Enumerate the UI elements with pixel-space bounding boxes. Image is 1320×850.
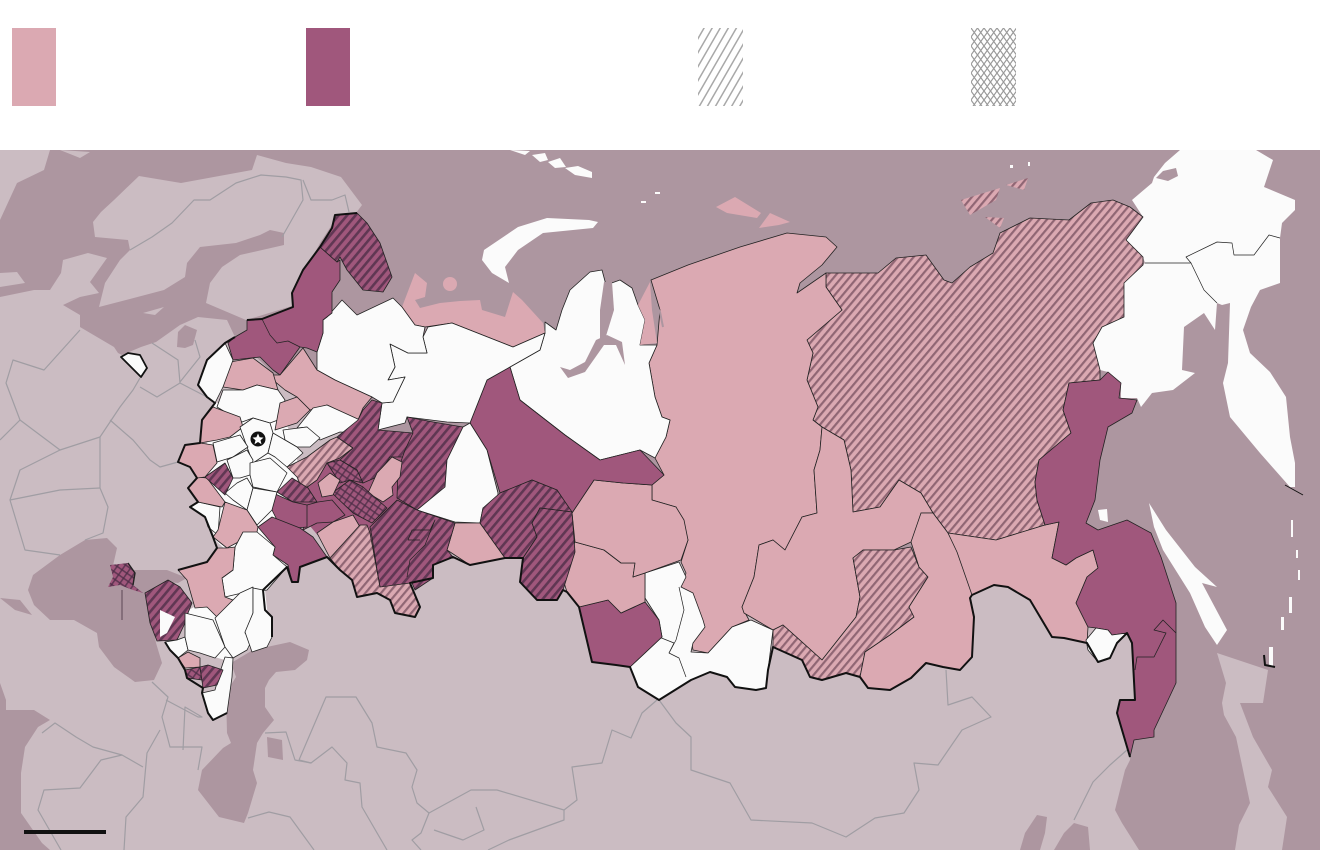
region: Kaliningrad: [121, 353, 147, 377]
region: Saratov pink: [317, 515, 360, 558]
region: Kaluga white: [213, 435, 248, 462]
region: Tambov dark: [272, 493, 307, 528]
region: Novgorod pink: [223, 358, 278, 390]
line: Karelia border: [262, 319, 300, 347]
region: Samara hatched: [330, 525, 420, 617]
Kara-Bogaz: [267, 737, 283, 760]
islands: small Arctic specks: [641, 162, 1030, 203]
scale bar: [24, 830, 106, 834]
Gulf of Riga: [177, 325, 197, 348]
region: Nizhny Novgorod hatched: [287, 437, 353, 490]
islands: New Siberian: [961, 178, 1028, 228]
islands: Franz Josef Land: [510, 150, 592, 178]
map: inland seas: [0, 325, 1090, 850]
line: Khakassia: [669, 587, 686, 677]
region: Omsk hatched: [520, 508, 575, 600]
region: Karelia and Leningrad: [228, 247, 340, 375]
legend swatch: light pink: [12, 28, 56, 106]
region: Yaroslavl pink: [275, 397, 310, 430]
water: Gulf of Ob: [560, 282, 625, 378]
water: Yenisei Gulf: [655, 303, 663, 327]
Okhotsk tip Sakhalin: [1149, 503, 1227, 645]
region: Voronezh dark: [258, 517, 327, 582]
region: Moscow white: [240, 418, 273, 463]
region: Tuva and Khakassia: [630, 562, 773, 700]
internal lines: far east: [1145, 235, 1280, 303]
region: Jewish Autonomous: [1086, 628, 1127, 662]
line: Altai: [659, 637, 674, 653]
national border of Russia: [165, 213, 1303, 757]
water: Chaun Bay: [1156, 168, 1178, 181]
region: Nenets pink: [402, 273, 545, 347]
region: Komi: [378, 323, 545, 430]
underlay: Volga regions: [280, 440, 450, 590]
map: neighbouring country borders: [0, 175, 1127, 850]
underlay: European Russia west: [185, 400, 300, 660]
legend swatch: diagonal hatch: [698, 28, 743, 106]
region: Bryansk hatched: [205, 463, 233, 495]
region: Tatarstan crosshatched: [332, 480, 387, 523]
region: Pink west: [178, 443, 217, 478]
region: Pskov white: [198, 343, 233, 403]
region: Bashkortostan hatched: [370, 500, 455, 590]
region: Khanty-Mansi: [470, 367, 664, 513]
island: Novaya Zemlya: [482, 218, 598, 283]
region: Kamchatka: [1186, 235, 1295, 487]
region: Chechnya hatched: [200, 665, 223, 688]
Yellow Sea fragment: [1054, 823, 1090, 850]
icon: Moscow star marker: [250, 432, 266, 446]
island: Shantar: [1098, 509, 1108, 522]
region: Stavropol whites: [165, 587, 272, 720]
region: Perm hatched: [397, 417, 463, 510]
region: Ossetia crosshatched: [185, 667, 202, 680]
region: Kuban hatched: [145, 580, 192, 641]
region: Chelyabinsk pink: [447, 523, 505, 565]
region: Gydan pink: [638, 282, 657, 345]
region: Irkutsk: [742, 427, 933, 660]
region: Pink south central: [213, 502, 258, 548]
region: Ivanovo white: [283, 427, 320, 447]
region: Oryol pink: [188, 477, 225, 507]
region: Krasnodar pink: [178, 547, 235, 617]
line: Primorye boundary: [1135, 620, 1176, 670]
line: Nenets south border: [415, 323, 545, 347]
region group: central whites: [190, 450, 287, 535]
lake: [160, 610, 175, 637]
region: Zabaykalsky: [860, 513, 979, 690]
line: Crimea border: [128, 563, 135, 585]
islands: Kurils: [1269, 520, 1300, 667]
Black Sea and Azov: [28, 538, 187, 682]
island: Kolguev: [443, 277, 457, 291]
region: Kemerovo dark: [579, 600, 662, 667]
line: Bashkortostan inner: [407, 520, 435, 577]
map: Russian regions: [108, 150, 1295, 757]
region: Karachay pink: [178, 652, 200, 668]
region: Chukotka: [1126, 150, 1295, 263]
region: Penza hatched: [277, 478, 317, 502]
islands: Severnaya Zemlya: [716, 197, 790, 228]
region: Smolensk pink: [200, 407, 243, 443]
region: Udmurtia pink: [368, 457, 402, 502]
legend: [12, 28, 1016, 106]
Bo Hai: [1020, 815, 1047, 850]
legend swatch: dark purple: [306, 28, 350, 106]
region: Krasnoyarsk: [649, 233, 842, 653]
region group: far east white: [1093, 150, 1295, 645]
region: Tyumen hatched: [480, 480, 572, 558]
region: Kirov hatched: [337, 400, 413, 483]
region: Vologda pink: [273, 348, 372, 420]
region: Buryatia: [773, 547, 928, 680]
region: Magadan: [1093, 263, 1217, 407]
region: Chuvashia crosshatched: [327, 460, 363, 483]
region: Yakutia: [807, 200, 1143, 540]
region: Tver white: [217, 385, 285, 423]
region: Rostov white: [222, 532, 287, 597]
region: Novosibirsk pink: [560, 542, 645, 613]
leader line: [121, 590, 123, 620]
region: Murmansk: [320, 213, 392, 292]
region: Arkhangelsk: [317, 298, 427, 403]
region: Crimea crosshatched: [108, 563, 143, 593]
region: Yamalo-Nenets: [510, 270, 670, 460]
region: Mordovia pink: [318, 473, 340, 497]
region: Amur: [948, 522, 1098, 643]
Caspian Sea: [198, 642, 309, 823]
region: Khabarovsk north: [1035, 372, 1176, 757]
Aegean fragment: [0, 598, 32, 615]
region: Kostroma white: [297, 405, 362, 440]
region: Sverdlovsk white: [417, 423, 498, 523]
legend swatch: cross hatch: [971, 28, 1016, 106]
region: Vladimir white: [268, 433, 303, 467]
Mediterranean corner: [0, 683, 50, 850]
region: Tomsk pink: [572, 480, 688, 577]
region: Ulyanovsk dark: [303, 500, 345, 530]
